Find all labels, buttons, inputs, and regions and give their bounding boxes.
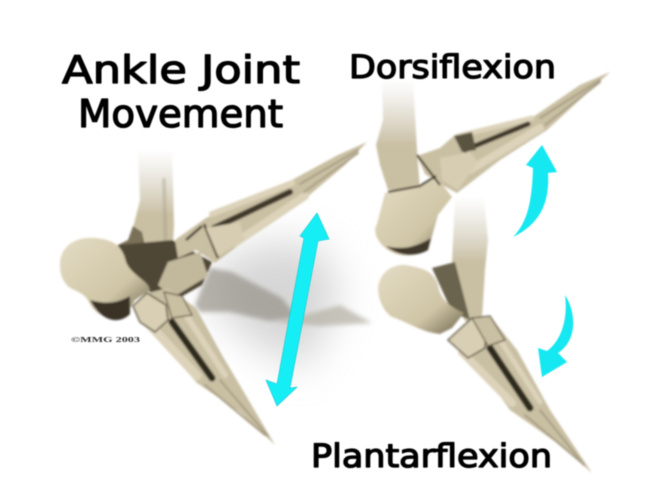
bone: calcaneus — [378, 265, 464, 334]
label: Dorsiflexion: Dorsiflexion — [349, 48, 556, 86]
bones: pointed foot metatarsals and toes — [133, 288, 275, 445]
bone: talus — [118, 240, 212, 302]
bone: tibia — [452, 197, 488, 322]
bones: forefoot — [417, 72, 610, 193]
skeleton: left ankle with both foot positions — [60, 142, 367, 445]
label: Plantarflexion: Plantarflexion — [311, 437, 552, 475]
title: Ankle Joint Movement: Movement — [78, 92, 283, 136]
copyright: ©MMG 2003 — [71, 335, 140, 344]
bone: calcaneus — [60, 238, 150, 318]
bone: tibia — [376, 80, 420, 190]
title: Ankle Joint Movement — [62, 48, 300, 136]
shadow: ghost foot behind left ankle — [195, 240, 372, 370]
arrow: dorsiflexion curved up — [513, 145, 557, 237]
arrow: plantarflexion curved down — [538, 295, 573, 377]
bones: pointed foot — [448, 316, 592, 473]
bone: tibia and fibula — [133, 150, 174, 262]
title: Ankle Joint Movement: Ankle Joint — [62, 48, 300, 92]
bone: calcaneus — [375, 178, 452, 255]
skeleton: dorsiflexed foot — [375, 72, 610, 255]
arrow: double-headed range of motion — [266, 213, 329, 406]
skeleton: plantarflexed foot — [378, 197, 592, 473]
bones: lifted foot metatarsals and toes — [175, 142, 367, 263]
